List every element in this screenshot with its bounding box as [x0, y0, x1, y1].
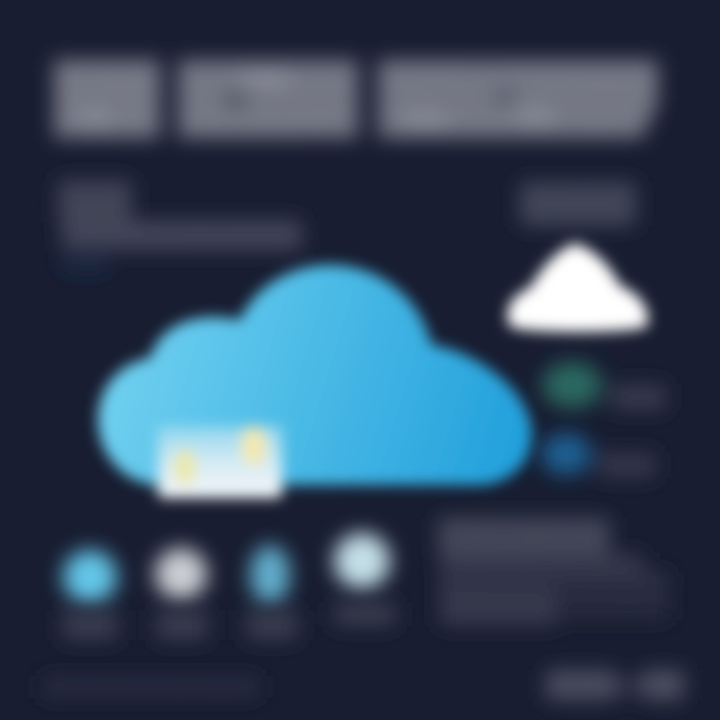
- icon: blue circle: [63, 550, 117, 604]
- icon labels: Share: [158, 617, 206, 634]
- icon labels: Sync: [64, 617, 116, 634]
- icon: white cloud: [507, 243, 648, 332]
- footer left: Cloud storage guide: [42, 680, 258, 697]
- main cloud: [98, 265, 532, 485]
- bottom right text block: Protected: [438, 601, 554, 618]
- title: STORAGE: [190, 63, 352, 105]
- icon row: [63, 533, 390, 605]
- title: SOLUTIONS: [390, 63, 654, 105]
- green swatch: [542, 362, 602, 408]
- icon: grey circle: [155, 548, 207, 600]
- bottom right text block: [438, 518, 670, 626]
- card highlight right: [241, 426, 267, 466]
- right text block: Private cloud: [520, 203, 635, 223]
- card in cloud: [158, 426, 282, 498]
- left text block: [58, 180, 302, 276]
- card highlight left: [174, 449, 196, 485]
- title: MODERN: [190, 101, 352, 143]
- title: BUSINESS: [390, 101, 638, 143]
- footer right: co: [642, 670, 684, 700]
- left text block: Overview: [60, 202, 131, 222]
- title: [54, 60, 658, 143]
- bottom right text block: Pay only for the space: [438, 553, 642, 570]
- footer right: Cloud: [546, 670, 614, 700]
- legend: green item: [542, 362, 666, 410]
- icon: pale circle: [334, 533, 390, 589]
- bottom right text block: Flexible plans: [438, 531, 610, 548]
- right text block: Public cloud: [520, 181, 635, 201]
- icon labels: Secure: [336, 607, 394, 624]
- legend: blue item: [541, 433, 657, 478]
- green label: Backup: [610, 387, 666, 409]
- icon labels: [62, 602, 396, 640]
- footer right: [546, 670, 684, 700]
- icon: blue tall: [250, 545, 290, 605]
- left text block: Storage: [60, 181, 130, 201]
- footer left: [42, 676, 260, 698]
- blue swatch: [541, 433, 591, 475]
- icon labels: Scale: [246, 617, 296, 634]
- bottom right text block: Upgrade when your team grows: [438, 575, 668, 592]
- left text block: Learn: [60, 254, 110, 276]
- blue label: Archive: [597, 455, 657, 477]
- left text block: Secure access from anywhere: [60, 225, 300, 245]
- right text block: [520, 181, 636, 226]
- title: CLOUD: [58, 63, 154, 105]
- card body: [158, 426, 282, 498]
- title: FOR: [58, 101, 154, 143]
